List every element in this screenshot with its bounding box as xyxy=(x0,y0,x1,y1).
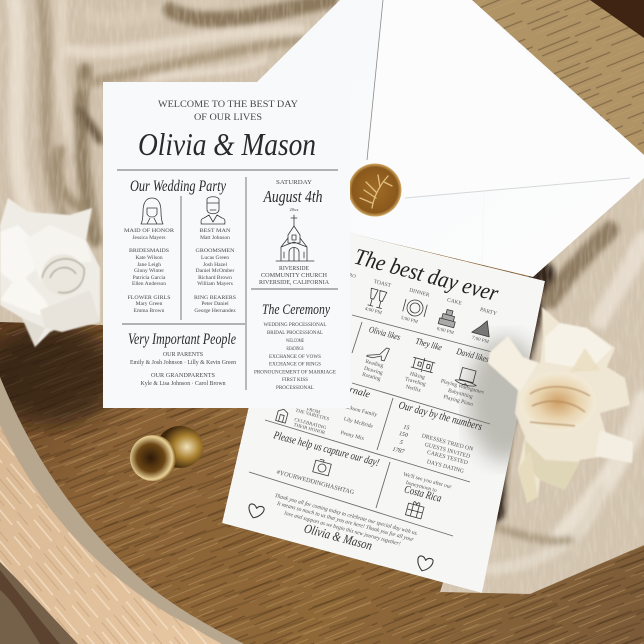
likes row: David likes xyxy=(455,346,490,364)
text: right attendants: Matt Johnson xyxy=(200,235,230,241)
timeline row: 6:00 PM xyxy=(436,327,455,336)
numbers section: DAYS DATING xyxy=(426,459,465,475)
text: left attendants: Mary Green xyxy=(136,301,163,307)
panel: date and venue: RIVERSIDE xyxy=(279,266,309,272)
panel: wedding party: Our Wedding Party xyxy=(130,178,226,195)
text: right attendants: Richard Brown xyxy=(198,275,232,281)
honeymoon section xyxy=(403,471,452,519)
wax seal xyxy=(348,164,402,216)
icon: top hat xyxy=(454,367,477,387)
capture section xyxy=(271,429,381,496)
icon: shoe xyxy=(366,348,390,362)
timeline row: PARTY xyxy=(479,307,497,317)
icon: pets xyxy=(410,356,436,374)
rose shadow on card xyxy=(467,338,543,462)
left partial section xyxy=(275,388,378,440)
text: right attendants: RING BEARERS xyxy=(194,295,236,301)
text: left attendants: Jane Leigh xyxy=(137,262,161,268)
panel: the ceremony: EXCHANGE OF VOWS xyxy=(269,355,321,360)
icon: camera xyxy=(313,458,332,476)
timeline row: 5:00 PM xyxy=(400,316,419,325)
panel: very important people: Kyle & Lisa Johnson · Carol Brown xyxy=(140,381,226,387)
panel: the ceremony: PROCESSIONAL xyxy=(276,386,314,391)
text: left attendants: BRIDESMAIDS xyxy=(129,248,169,254)
panel: date and venue: COMMUNITY CHURCH xyxy=(261,273,328,279)
text: left attendants: Emma Brown xyxy=(134,308,165,314)
right cream rose xyxy=(488,307,633,503)
likes row: Olivia likes xyxy=(368,324,402,342)
numbers section: CAKES TESTED xyxy=(426,450,468,466)
icon: heart right xyxy=(417,555,434,572)
text: right attendants: GROOMSMEN xyxy=(196,248,235,254)
likes row: Playing Piano xyxy=(443,394,474,408)
honeymoon section: honeymoon to xyxy=(405,480,438,494)
panel: the ceremony: READINGS xyxy=(286,347,304,352)
gold ring xyxy=(130,426,203,481)
likes row: Netflix xyxy=(405,383,422,394)
likes row: Playing videogames xyxy=(440,378,485,396)
panel: the ceremony: The Ceremony xyxy=(262,302,330,318)
left partial section: Jackson Family xyxy=(343,404,378,418)
text: left attendants: Ginny Winter xyxy=(134,268,164,274)
text: left attendants: Patricia Garcia xyxy=(133,275,166,281)
likes row: Traveling xyxy=(404,376,427,388)
icon: gift xyxy=(405,500,425,519)
panel: date and venue xyxy=(259,180,330,286)
thank you note: love and support as we begin this new journey together! xyxy=(284,511,401,547)
numbers section: Our day by the numbers xyxy=(397,399,483,433)
likes row: They like xyxy=(414,336,443,352)
timeline row xyxy=(350,273,498,344)
timeline row: 4:00 PM xyxy=(364,307,383,316)
envelope xyxy=(257,0,644,277)
numbers section xyxy=(392,399,483,475)
heading: welcome xyxy=(158,100,298,123)
left white rose xyxy=(0,198,100,347)
title: couple names: Olivia & Mason xyxy=(138,126,316,162)
text: right attendants: William Mayers xyxy=(197,281,233,287)
panel: very important people: Emily & Josh Johnson · Lilly & Kevin Green xyxy=(130,360,236,366)
icon: bride xyxy=(141,198,163,224)
text: right attendants xyxy=(194,228,236,314)
honeymoon section: Costa Rica xyxy=(403,483,443,505)
icon: champagne glasses xyxy=(367,288,387,309)
thank you note: Thank you all for coming today to celebrate our special day with us. xyxy=(274,492,419,537)
icon: cake xyxy=(438,308,458,328)
capture section: Please help us capture our day! xyxy=(271,429,381,469)
timeline row: DINNER xyxy=(408,287,430,299)
icon: groom xyxy=(201,197,225,224)
text: right attendants: Lucas Green xyxy=(201,255,229,261)
timeline row: TOAST xyxy=(373,279,392,289)
thank you note: Olivia & Mason xyxy=(302,520,374,553)
cloth top left xyxy=(0,0,345,345)
panel: the ceremony: FIRST KISS xyxy=(282,378,308,383)
text: left attendants: Ellen Anderson xyxy=(132,281,166,287)
left partial section: FROM xyxy=(306,407,321,416)
panel: the ceremony: WELCOME xyxy=(286,339,304,344)
text: left attendants xyxy=(124,228,174,314)
text: right attendants: Daniel McOmber xyxy=(196,268,234,274)
panel: very important people: OUR PARENTS xyxy=(163,352,203,358)
text: right attendants: Peter Daniel xyxy=(201,301,229,307)
panel: the ceremony: BRIDAL PROCESSIONAL xyxy=(267,331,323,336)
panel: date and venue: RIVERSIDE, CALIFORNIA xyxy=(259,280,330,286)
numbers section: GUESTS INVITED xyxy=(424,442,471,460)
numbers section: 1787 xyxy=(392,447,406,456)
text: left attendants: FLOWER GIRLS xyxy=(128,295,170,301)
timeline row: INTRO xyxy=(340,271,357,280)
card: program xyxy=(103,82,350,408)
cloth right xyxy=(430,160,644,600)
left partial section: Penny Mix xyxy=(340,430,365,442)
panel: very important people xyxy=(128,331,236,387)
panel: date and venue: August 4th xyxy=(263,187,322,206)
likes row: Drawing xyxy=(363,366,384,376)
text: right attendants: Josh Hazel xyxy=(203,262,227,268)
heading: welcome: WELCOME TO THE BEST DAY xyxy=(158,100,298,110)
likes row: Babysitting xyxy=(447,388,474,400)
tray rim xyxy=(0,377,244,644)
left partial section: Lily McBride xyxy=(343,416,374,430)
card: the best day ever xyxy=(222,219,545,593)
panel: date and venue: 20xx xyxy=(290,207,299,212)
icon: heart left xyxy=(248,503,265,518)
capture section: #YOURWEDDINGHASHTAG xyxy=(276,469,355,496)
left partial section: Journale xyxy=(334,381,372,401)
panel: the ceremony xyxy=(254,302,336,391)
numbers section: DRESSES TRIED ON xyxy=(421,433,474,453)
likes row: Hiking xyxy=(409,371,426,381)
heading: the best day ever: The best day ever xyxy=(352,244,502,306)
text: right attendants: George Hernandez xyxy=(194,308,236,314)
text: left attendants: MAID OF HONOR xyxy=(124,228,174,234)
heading: welcome: OF OUR LIVES xyxy=(194,113,262,123)
numbers section: 5 xyxy=(399,440,403,446)
thank you note: It means so much to us that you are here! Thank you for all your xyxy=(275,500,415,543)
wood top right xyxy=(465,0,644,165)
panel: the ceremony: WEDDING PROCESSIONAL xyxy=(264,323,327,328)
timeline row: 7:00 PM xyxy=(471,336,490,345)
text: right attendants: BEST MAN xyxy=(200,228,231,234)
panel: date and venue: SATURDAY xyxy=(276,180,313,186)
left partial section: CELEBRATING xyxy=(294,418,327,431)
icon: dinner plate xyxy=(402,299,428,317)
icon: church xyxy=(276,215,314,261)
numbers section: 15 xyxy=(403,424,410,432)
text: left attendants: Jessica Mayers xyxy=(132,235,166,241)
panel: very important people: OUR GRANDPARENTS xyxy=(151,373,215,379)
likes row: Rotating xyxy=(361,372,381,382)
panel: very important people: Very Important People xyxy=(128,331,236,348)
timeline row: CAKE xyxy=(446,297,463,307)
honeymoon section: We'll see you after our xyxy=(403,471,452,490)
likes row: Reading xyxy=(365,359,384,369)
text: left attendants: Kate Wilson xyxy=(135,255,163,261)
panel: the ceremony: EXCHANGE OF RINGS xyxy=(269,362,321,368)
likes row xyxy=(361,324,490,408)
left partial section: THEIR HONOR xyxy=(293,423,326,436)
numbers section: 150 xyxy=(398,431,408,439)
icon: party xyxy=(471,320,490,338)
panel: the ceremony: PRONOUNCEMENT OF MARRIAGE xyxy=(254,370,336,376)
panel: wedding party xyxy=(124,178,236,314)
icon: building xyxy=(276,408,289,423)
left partial section: THE VARIETIES xyxy=(295,409,330,422)
